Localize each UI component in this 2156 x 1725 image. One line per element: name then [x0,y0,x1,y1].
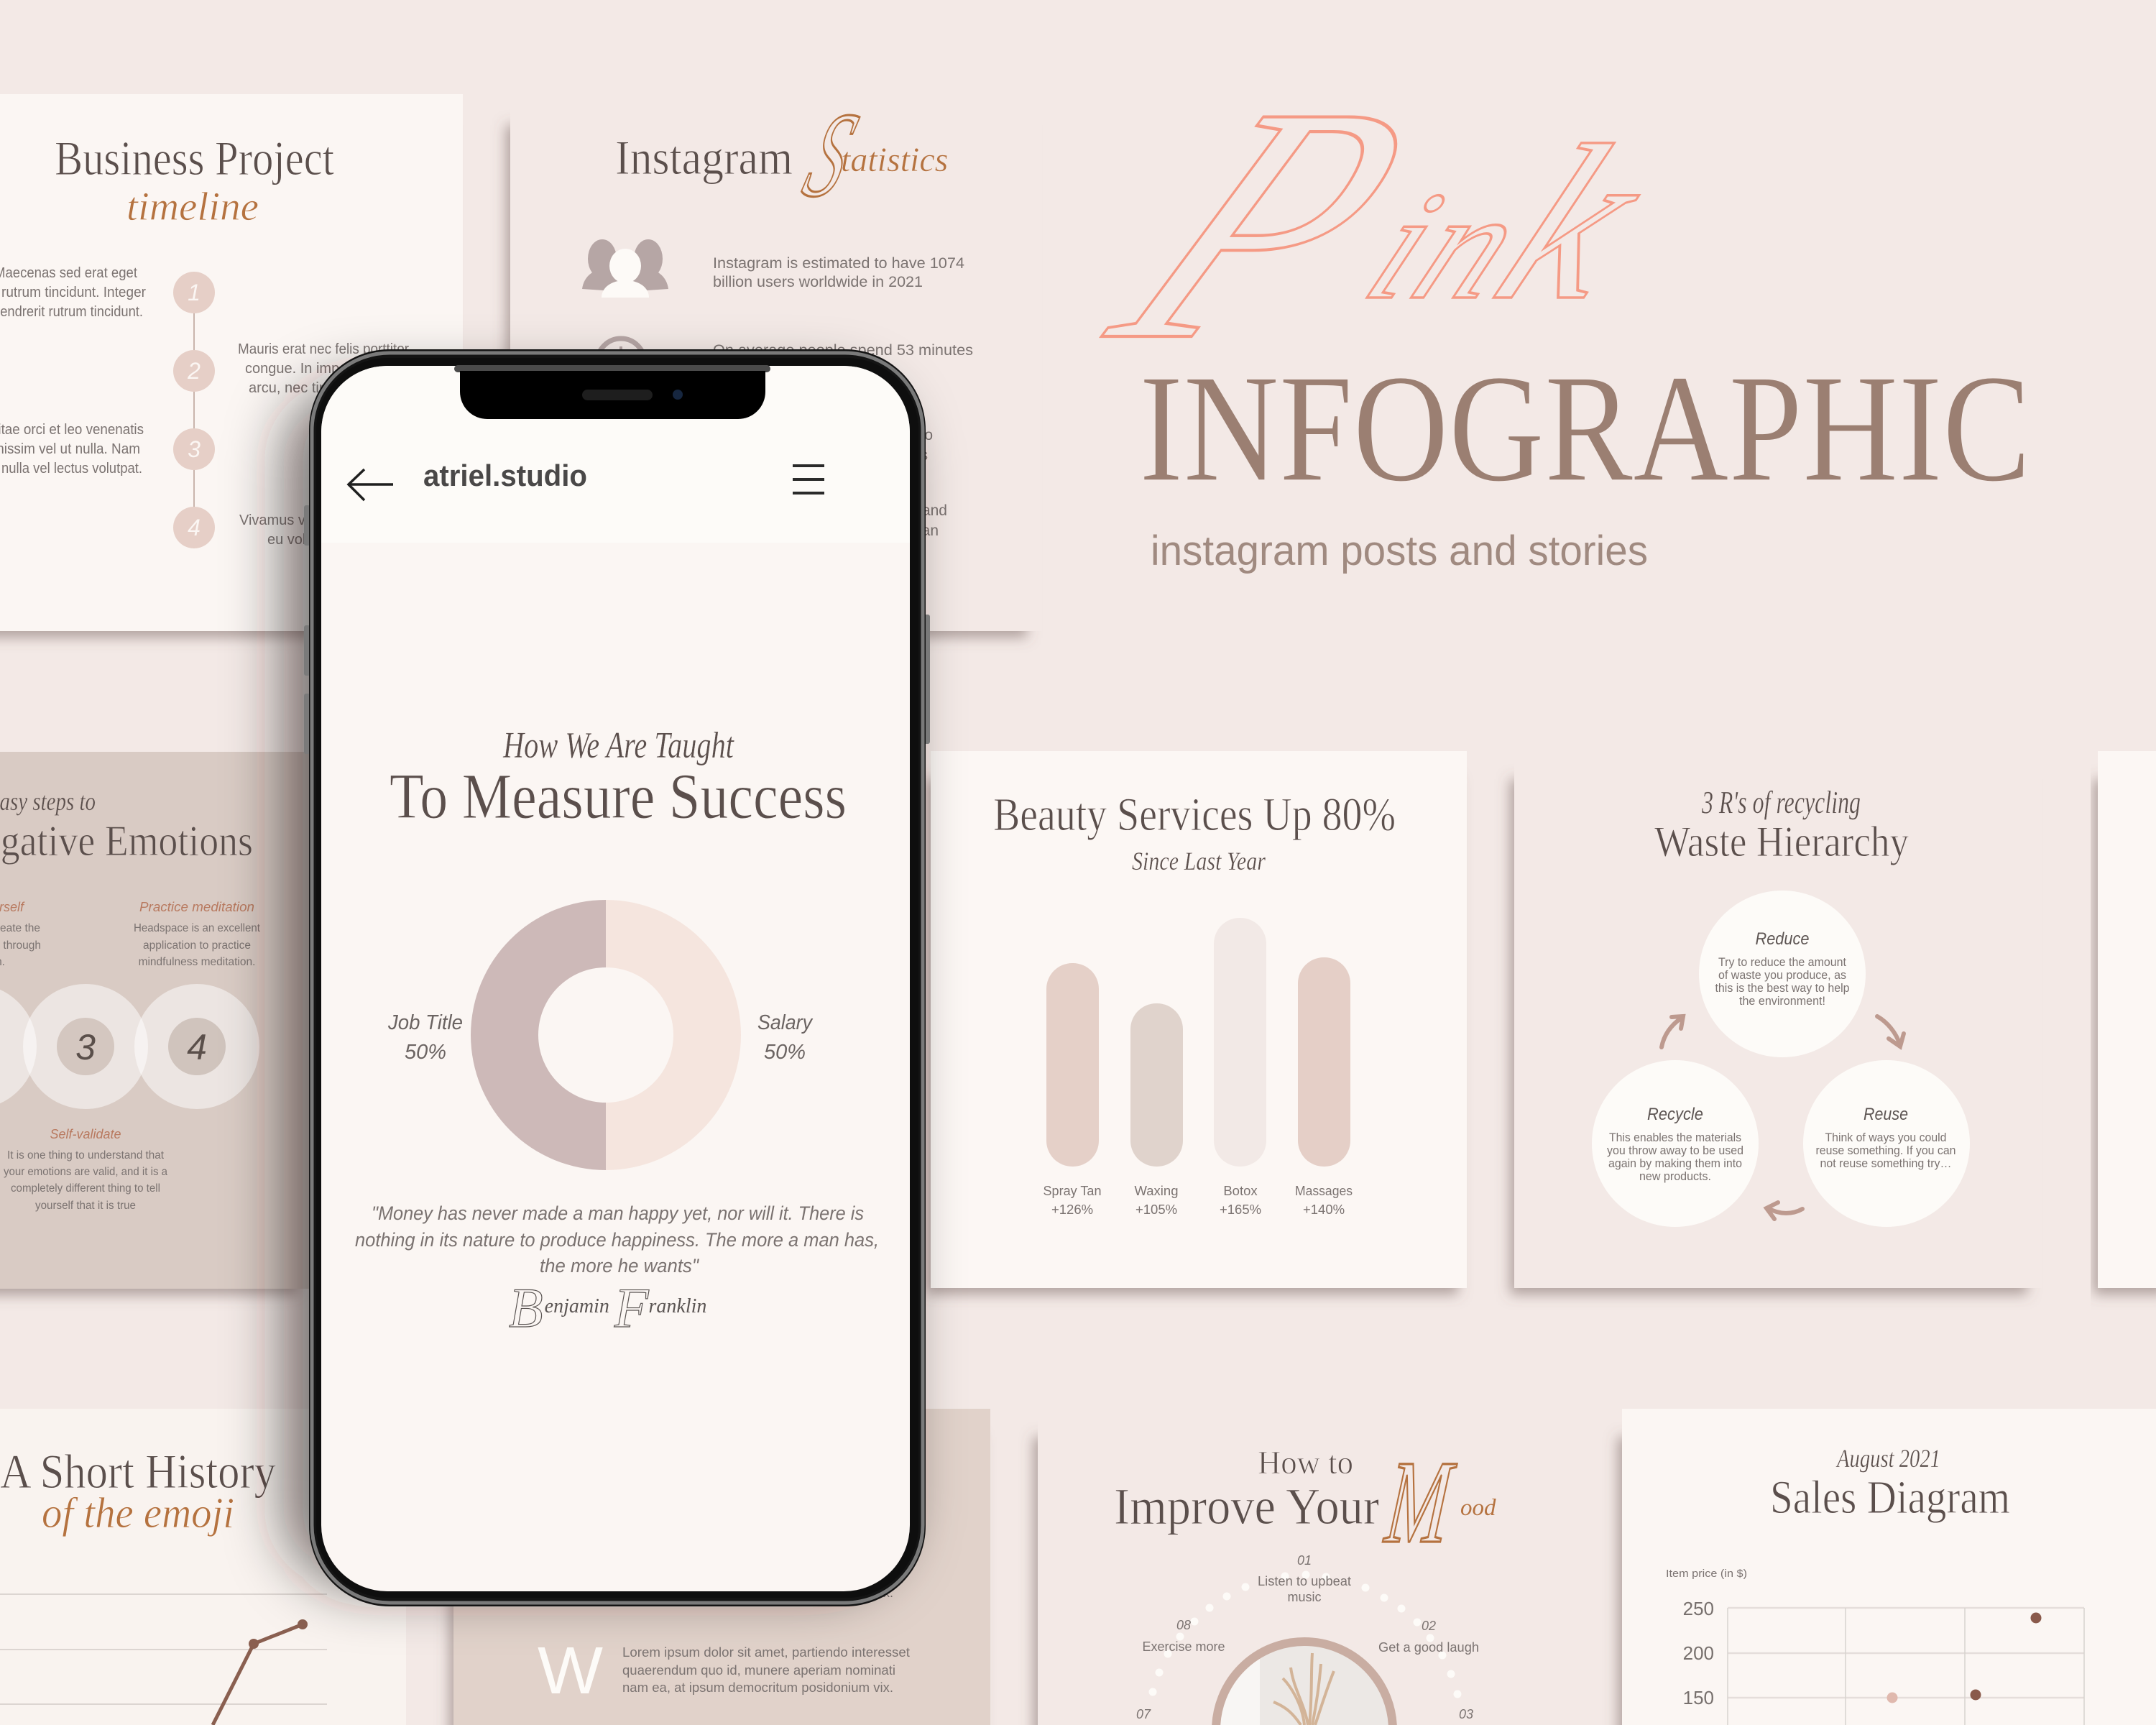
heading: statistics script: tatistics [841,141,948,179]
icon: menu [793,466,824,493]
step text top: Practice meditation [139,900,254,914]
bar chart [1046,918,1350,1167]
circle: reuse: reuse something. If you can [1815,1144,1956,1157]
body text: vix. [874,1586,893,1600]
panel: short history of the emoji [0,1409,406,1725]
step text top: Headspace is an excellent [134,922,261,934]
bar labels: +126% [1051,1202,1093,1217]
step circles: 4 [187,1027,207,1067]
heading: instagram: Instagram [615,130,793,185]
step text right 4: eu volutpat [267,532,338,548]
line chart [0,1594,327,1725]
step circles: 3 [75,1027,96,1067]
donut chart [471,900,741,1170]
subheading: How We Are Taught [502,725,734,766]
circle: reuse: Think of ways you could [1825,1131,1946,1144]
bar labels: +105% [1135,1202,1177,1217]
mood list labels: 01 [1297,1553,1312,1568]
donut label: salary: Salary [757,1011,813,1034]
quote [355,1202,879,1276]
text: time stat: On average people spend 53 minutes [713,342,973,359]
heading: timeline script: timeline [126,185,259,229]
text: partial lines: to [920,427,933,443]
subheading: 3 R's of recycling [1701,785,1861,820]
heading: script: ood [1460,1495,1496,1521]
mood list labels: Exercise more [1143,1639,1225,1654]
text: users stat: billion users worldwide in 2021 [713,274,923,290]
heading: Beauty Services Up 80% [993,788,1396,841]
panel: business project timeline [0,94,463,631]
donut label: job title: 50% [405,1041,446,1064]
subheading: How to [1258,1444,1353,1481]
arrow: reduce to reuse [1877,1016,1904,1046]
body text: nam ea, at ipsum democritum posidonium vix. [622,1680,893,1695]
quote: nothing in its nature to produce happiness. The more a man has, [355,1229,879,1251]
mood list labels: 02 [1422,1619,1436,1633]
step text right 4: Vivamus vitae [239,512,328,528]
signature: B [509,1276,543,1339]
circle: recycle: new products. [1639,1170,1711,1183]
subheading: Since Last Year [1132,847,1266,875]
title: pink script: ink [1335,99,1688,346]
bar labels: Massages [1295,1183,1353,1198]
circle: reduce: this is the best way to help [1715,982,1850,995]
step text top: application to practice [143,939,251,952]
donut label: salary: 50% [764,1041,806,1064]
heading: Improve Your [1114,1478,1379,1535]
panel: improve your mood [1026,1430,1496,1725]
mood list labels: music [1287,1590,1322,1604]
text: users stat: Instagram is estimated to have 1074 [713,255,964,272]
circle: recycle: Recycle [1647,1105,1703,1124]
text: partial lines [917,427,947,539]
circle: recycle [1592,1060,1759,1227]
bar labels: Spray Tan [1044,1183,1101,1198]
subtitle: instagram posts and stories [1151,528,1648,574]
bar labels: +140% [1303,1202,1345,1217]
side buttons [304,505,930,754]
heading: Waste Hierarchy [1654,818,1909,865]
step text left 3: nulla vel lectus volutpat. [1,461,142,477]
step text bottom: Self-validate [50,1127,121,1141]
panel: sales diagram [1622,1409,2156,1725]
heading: script [1380,1436,1496,1568]
step text top: mindfulness meditation. [139,956,255,968]
bar labels: +165% [1220,1202,1261,1217]
mood list labels: Listen to upbeat [1258,1574,1351,1588]
icon: back arrow [349,469,393,500]
panel: instagram statistics [510,88,1042,631]
heading: script: of the emoji [42,1489,234,1537]
phone shadow [284,381,902,1588]
quote: the more he wants" [540,1255,699,1276]
step text right 2 [238,341,409,396]
step circles [0,984,259,1109]
signature: enjamin [545,1295,614,1317]
drop cap W: W [538,1633,603,1708]
mood list labels: Get a good laugh [1378,1640,1479,1655]
title: infographic: INFOGRAPHIC [1139,342,2031,514]
mirror arch image [1216,1639,1393,1725]
circle: reduce [1699,891,1866,1057]
step text left 1: rutrum tincidunt. Integer [1,285,146,300]
scatter chart: 200 [1683,1642,1714,1664]
site name: atriel.studio [423,459,587,492]
step text left 1 [0,265,146,320]
heading: Sales Diagram [1770,1471,2010,1524]
body text: quaerendum quo id, munere aperiam nominati [622,1663,895,1678]
heading: statistics script [791,88,948,222]
heading: statistics script: S [791,88,870,222]
circle: reuse [1803,1060,1970,1227]
donut label: salary [757,1011,813,1064]
screen [321,366,910,1591]
scatter chart: 250 [1683,1598,1714,1619]
mood list labels [1136,1553,1479,1721]
body text [622,1586,910,1695]
step text left 3 [0,422,144,477]
step text right 2: arcu, nec tincidunt [249,380,366,396]
subheading: August 2021 [1835,1444,1940,1473]
heading: To Measure Success [390,761,847,832]
title: pink script: P [1056,38,1473,410]
icon: clock [597,339,645,386]
axis title: Item price (in $) [1666,1568,1747,1580]
circle: reduce: Reduce [1755,929,1810,949]
step text bottom: It is one thing to understand that [7,1149,165,1162]
text: partial lines: is [917,447,928,464]
timeline line [193,295,195,525]
timeline steps [173,272,215,548]
arrow: reuse to recycle [1766,1202,1802,1219]
body text: Lorem ipsum dolor sit amet, partiendo interesset [622,1645,910,1660]
timeline steps: 3 [188,436,201,462]
notch [454,365,770,419]
step text bottom: your emotions are valid, and it is a [4,1166,167,1178]
mood list labels: 07 [1136,1707,1151,1721]
donut label: job title: Job Title [387,1011,463,1034]
phone body [309,349,926,1606]
heading: script: M [1380,1436,1460,1568]
signature: F [614,1276,650,1339]
step text bottom: yourself that it is true [35,1200,136,1212]
dots arc [1148,1571,1462,1698]
mood list labels: 08 [1176,1618,1191,1632]
heading: A Short History [0,1444,276,1499]
timeline steps: 1 [188,280,201,305]
circle: recycle: This enables the materials [1609,1131,1741,1144]
step text bottom [4,1127,167,1212]
panel: lorem drop cap [453,1409,990,1725]
step text right 4 [239,512,338,548]
arrow: recycle to reduce [1662,1016,1683,1047]
mood list labels: 03 [1459,1707,1473,1721]
scatter chart [1683,1598,2084,1725]
bar labels: Botox [1223,1183,1258,1198]
bar labels [1044,1183,1353,1217]
timeline steps: 2 [187,358,201,384]
icon: people [582,239,668,298]
scatter chart: 150 [1683,1687,1714,1708]
circle: recycle: you throw away to be used [1607,1144,1743,1157]
circle: reduce: the environment! [1739,995,1825,1008]
panel: negative emotions [0,752,316,1289]
title: pink script [1056,38,1688,410]
quote: "Money has never made a man happy yet, nor will it. There is [372,1202,864,1224]
step text right 2: Mauris erat nec felis porttitor [238,341,409,357]
donut label: job title [387,1011,463,1064]
step text bottom: completely different thing to tell [11,1182,160,1195]
step text top [134,900,261,968]
circle: recycle: again by making them into [1608,1157,1742,1170]
panel: beauty services bar chart [931,751,1467,1288]
circle: reduce: of waste you produce, as [1718,969,1846,982]
circle: reuse: not reuse something try… [1820,1157,1952,1170]
step text right 2: congue. In imperdiet [245,361,376,377]
panel: right edge card [2098,751,2156,1288]
bar labels: Waxing [1134,1183,1179,1198]
text: partial lines: and [922,502,947,519]
circle: reuse: Reuse [1864,1105,1908,1124]
panel: waste hierarchy [1514,748,2042,1288]
text: partial lines: an [922,523,939,539]
timeline steps: 4 [188,515,201,540]
heading: business project: Business Project [55,131,334,185]
partial text step 2 [0,900,41,968]
phone mockup [304,349,930,1606]
text: users stat [713,255,964,290]
signature: ranklin [649,1295,706,1317]
circle: reduce: Try to reduce the amount [1718,956,1846,969]
